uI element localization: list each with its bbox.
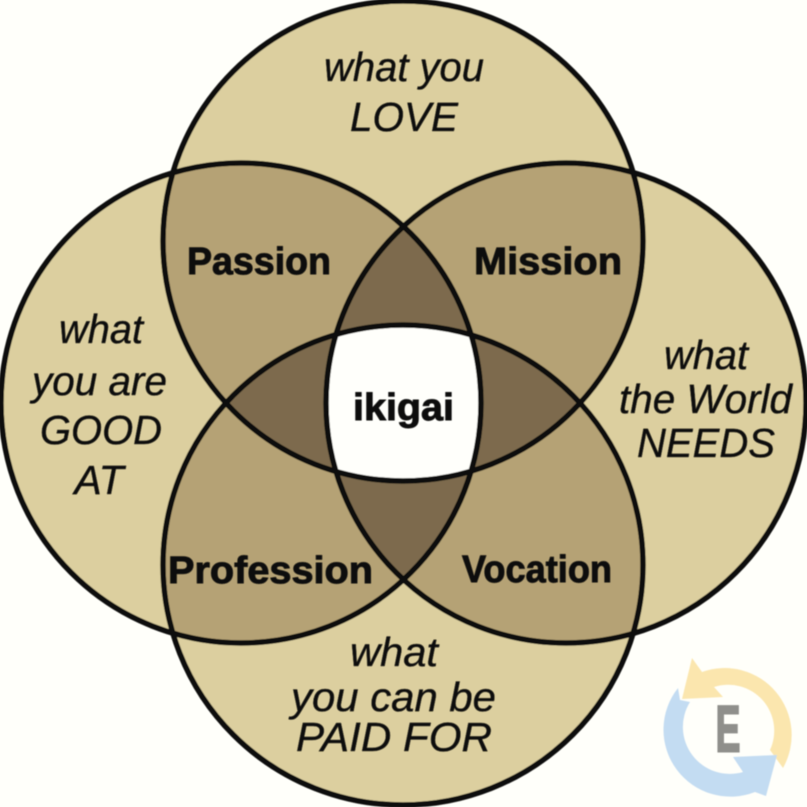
label: ikigai: ikigai xyxy=(353,387,454,429)
label: what you are good at: what xyxy=(59,306,145,352)
label: what the world needs xyxy=(619,332,793,466)
label: what you can be paid for: you can be xyxy=(288,674,496,720)
label: what the world needs: what xyxy=(664,332,750,378)
label: what you love: what you xyxy=(324,44,484,90)
pair overlaps: passion, mission, profession, vocation xyxy=(164,164,642,642)
label: what you are good at: you are xyxy=(29,358,167,404)
yellow arrow xyxy=(682,658,792,768)
label: mission: Mission xyxy=(474,241,622,283)
label: what the world needs: NEEDS xyxy=(637,420,775,466)
label: what you can be paid for: PAID FOR xyxy=(296,714,492,760)
label: passion: Passion xyxy=(187,241,331,283)
label: what you can be paid for: what xyxy=(350,629,440,675)
ikigai centre xyxy=(328,326,480,480)
label: what you are good at: AT xyxy=(71,457,127,503)
watermark logo xyxy=(663,658,792,797)
label: what you can be paid for xyxy=(288,629,496,760)
label: what you love: LOVE xyxy=(350,94,459,140)
label: profession: Profession xyxy=(168,550,373,592)
triple overlaps xyxy=(229,230,577,576)
label: what the world needs: the World xyxy=(619,376,793,422)
label: what you are good at xyxy=(29,306,167,503)
label: what you love xyxy=(324,44,484,140)
letter E: E xyxy=(716,692,740,766)
label: what you are good at: GOOD xyxy=(40,407,162,453)
blue arrow xyxy=(663,688,777,797)
label: vocation: Vocation xyxy=(462,549,612,591)
